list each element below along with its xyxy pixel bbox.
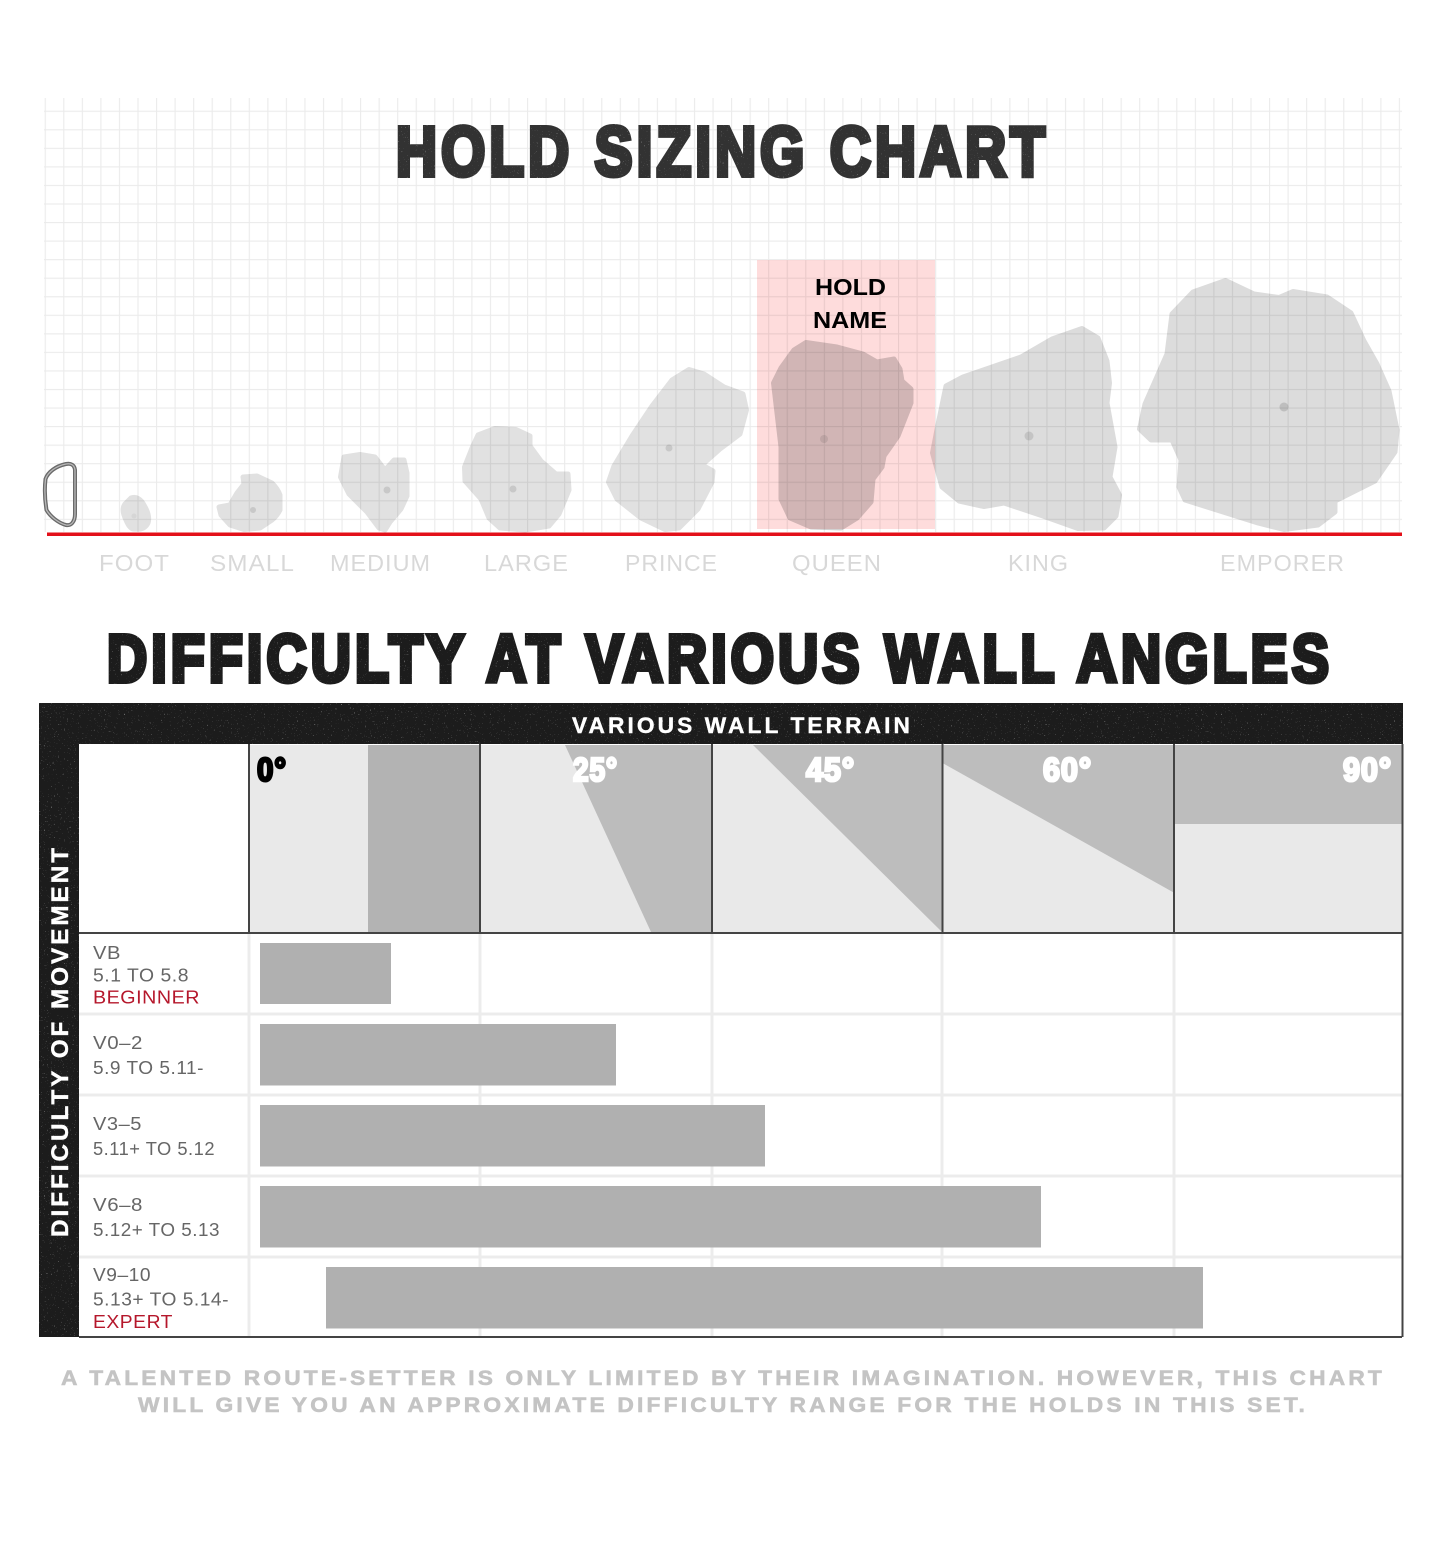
hold: king <box>932 328 1120 528</box>
wall angle cell: 45 degrees: 45° <box>806 751 855 788</box>
row: V9-10 expert: V9–10 <box>93 1264 151 1285</box>
row: V9-10 expert: 5.13+ TO 5.14- <box>93 1288 229 1310</box>
side band: difficulty of movement <box>39 744 79 1337</box>
footnote text <box>61 1366 1385 1417</box>
baseline: red line <box>47 532 1402 536</box>
header band: various wall terrain: VARIOUS WALL TERRAIN <box>572 713 913 738</box>
wall angle cell: 60 degrees <box>942 745 1174 932</box>
label: hold name: HOLD <box>815 274 886 300</box>
wall angle cell: 25 degrees <box>480 745 712 932</box>
row: V9-10 expert: EXPERT <box>93 1311 173 1332</box>
row: VB beginner: VB <box>93 942 121 963</box>
row: V3-5 <box>93 1105 765 1166</box>
row: V6-8: V6–8 <box>93 1194 143 1215</box>
holds silhouettes row <box>123 280 1397 530</box>
hold: queen <box>774 342 911 528</box>
labels: hold sizes: FOOT <box>99 550 170 576</box>
title: hold sizing chart: HOLD SIZING CHART <box>396 112 1049 190</box>
labels: hold sizes: KING <box>1008 550 1069 576</box>
hold: emporer <box>1140 280 1397 530</box>
icon: carabiner <box>45 464 75 525</box>
wall angle cell: 90 degrees: 90° <box>1343 751 1392 788</box>
labels: hold sizes: EMPORER <box>1220 550 1345 576</box>
labels: hold sizes: QUEEN <box>792 550 882 576</box>
wall angle cell: 90 degrees <box>1174 745 1402 932</box>
side band: difficulty of movement: DIFFICULTY OF MOVEMENT <box>47 845 74 1237</box>
row: V6-8 <box>93 1186 1041 1248</box>
row: V0-2: V0–2 <box>93 1032 143 1053</box>
header band: various wall terrain <box>39 703 1403 744</box>
row: V9-10 expert <box>93 1264 1203 1332</box>
wall angle cell: 25 degrees: 25° <box>573 751 618 788</box>
row: VB beginner: 5.1 TO 5.8 <box>93 964 189 986</box>
hold: prince <box>608 370 746 530</box>
labels: hold sizes: SMALL <box>210 550 295 576</box>
wall angle cell: 0 degrees: 0° <box>257 751 287 788</box>
labels: hold sizes: PRINCE <box>625 550 718 576</box>
labels: hold sizes <box>99 550 1345 576</box>
panel: difficulty table <box>39 703 1403 1337</box>
hold: large <box>464 428 569 530</box>
labels: hold sizes: MEDIUM <box>330 550 431 576</box>
hold: foot <box>123 497 149 529</box>
footnote text: WILL GIVE YOU AN APPROXIMATE DIFFICULTY RANGE FOR THE HOLDS IN THIS SET. <box>138 1393 1308 1417</box>
hold: small <box>219 476 280 530</box>
row: VB beginner <box>93 942 391 1008</box>
highlight: queen column <box>757 260 935 529</box>
row: V3-5: 5.11+ TO 5.12 <box>93 1138 215 1159</box>
row: V6-8: 5.12+ TO 5.13 <box>93 1219 220 1240</box>
wall angle cell: 0 degrees <box>250 745 480 932</box>
label: hold name <box>813 274 887 333</box>
row: V0-2: 5.9 TO 5.11- <box>93 1057 204 1078</box>
label: hold name: NAME <box>813 307 887 333</box>
wall angle cell: 45 degrees <box>712 745 942 932</box>
hold: medium <box>340 454 407 530</box>
row: VB beginner: BEGINNER <box>93 986 200 1008</box>
labels: hold sizes: LARGE <box>484 550 569 576</box>
row: V3-5: V3–5 <box>93 1113 142 1134</box>
row: V0-2 <box>93 1024 616 1086</box>
wall angle cell: 60 degrees: 60° <box>1043 751 1092 788</box>
panel: hold sizing chart <box>44 98 1402 576</box>
footnote text: A TALENTED ROUTE-SETTER IS ONLY LIMITED BY THEIR IMAGINATION. HOWEVER, THIS CHART <box>61 1366 1385 1390</box>
